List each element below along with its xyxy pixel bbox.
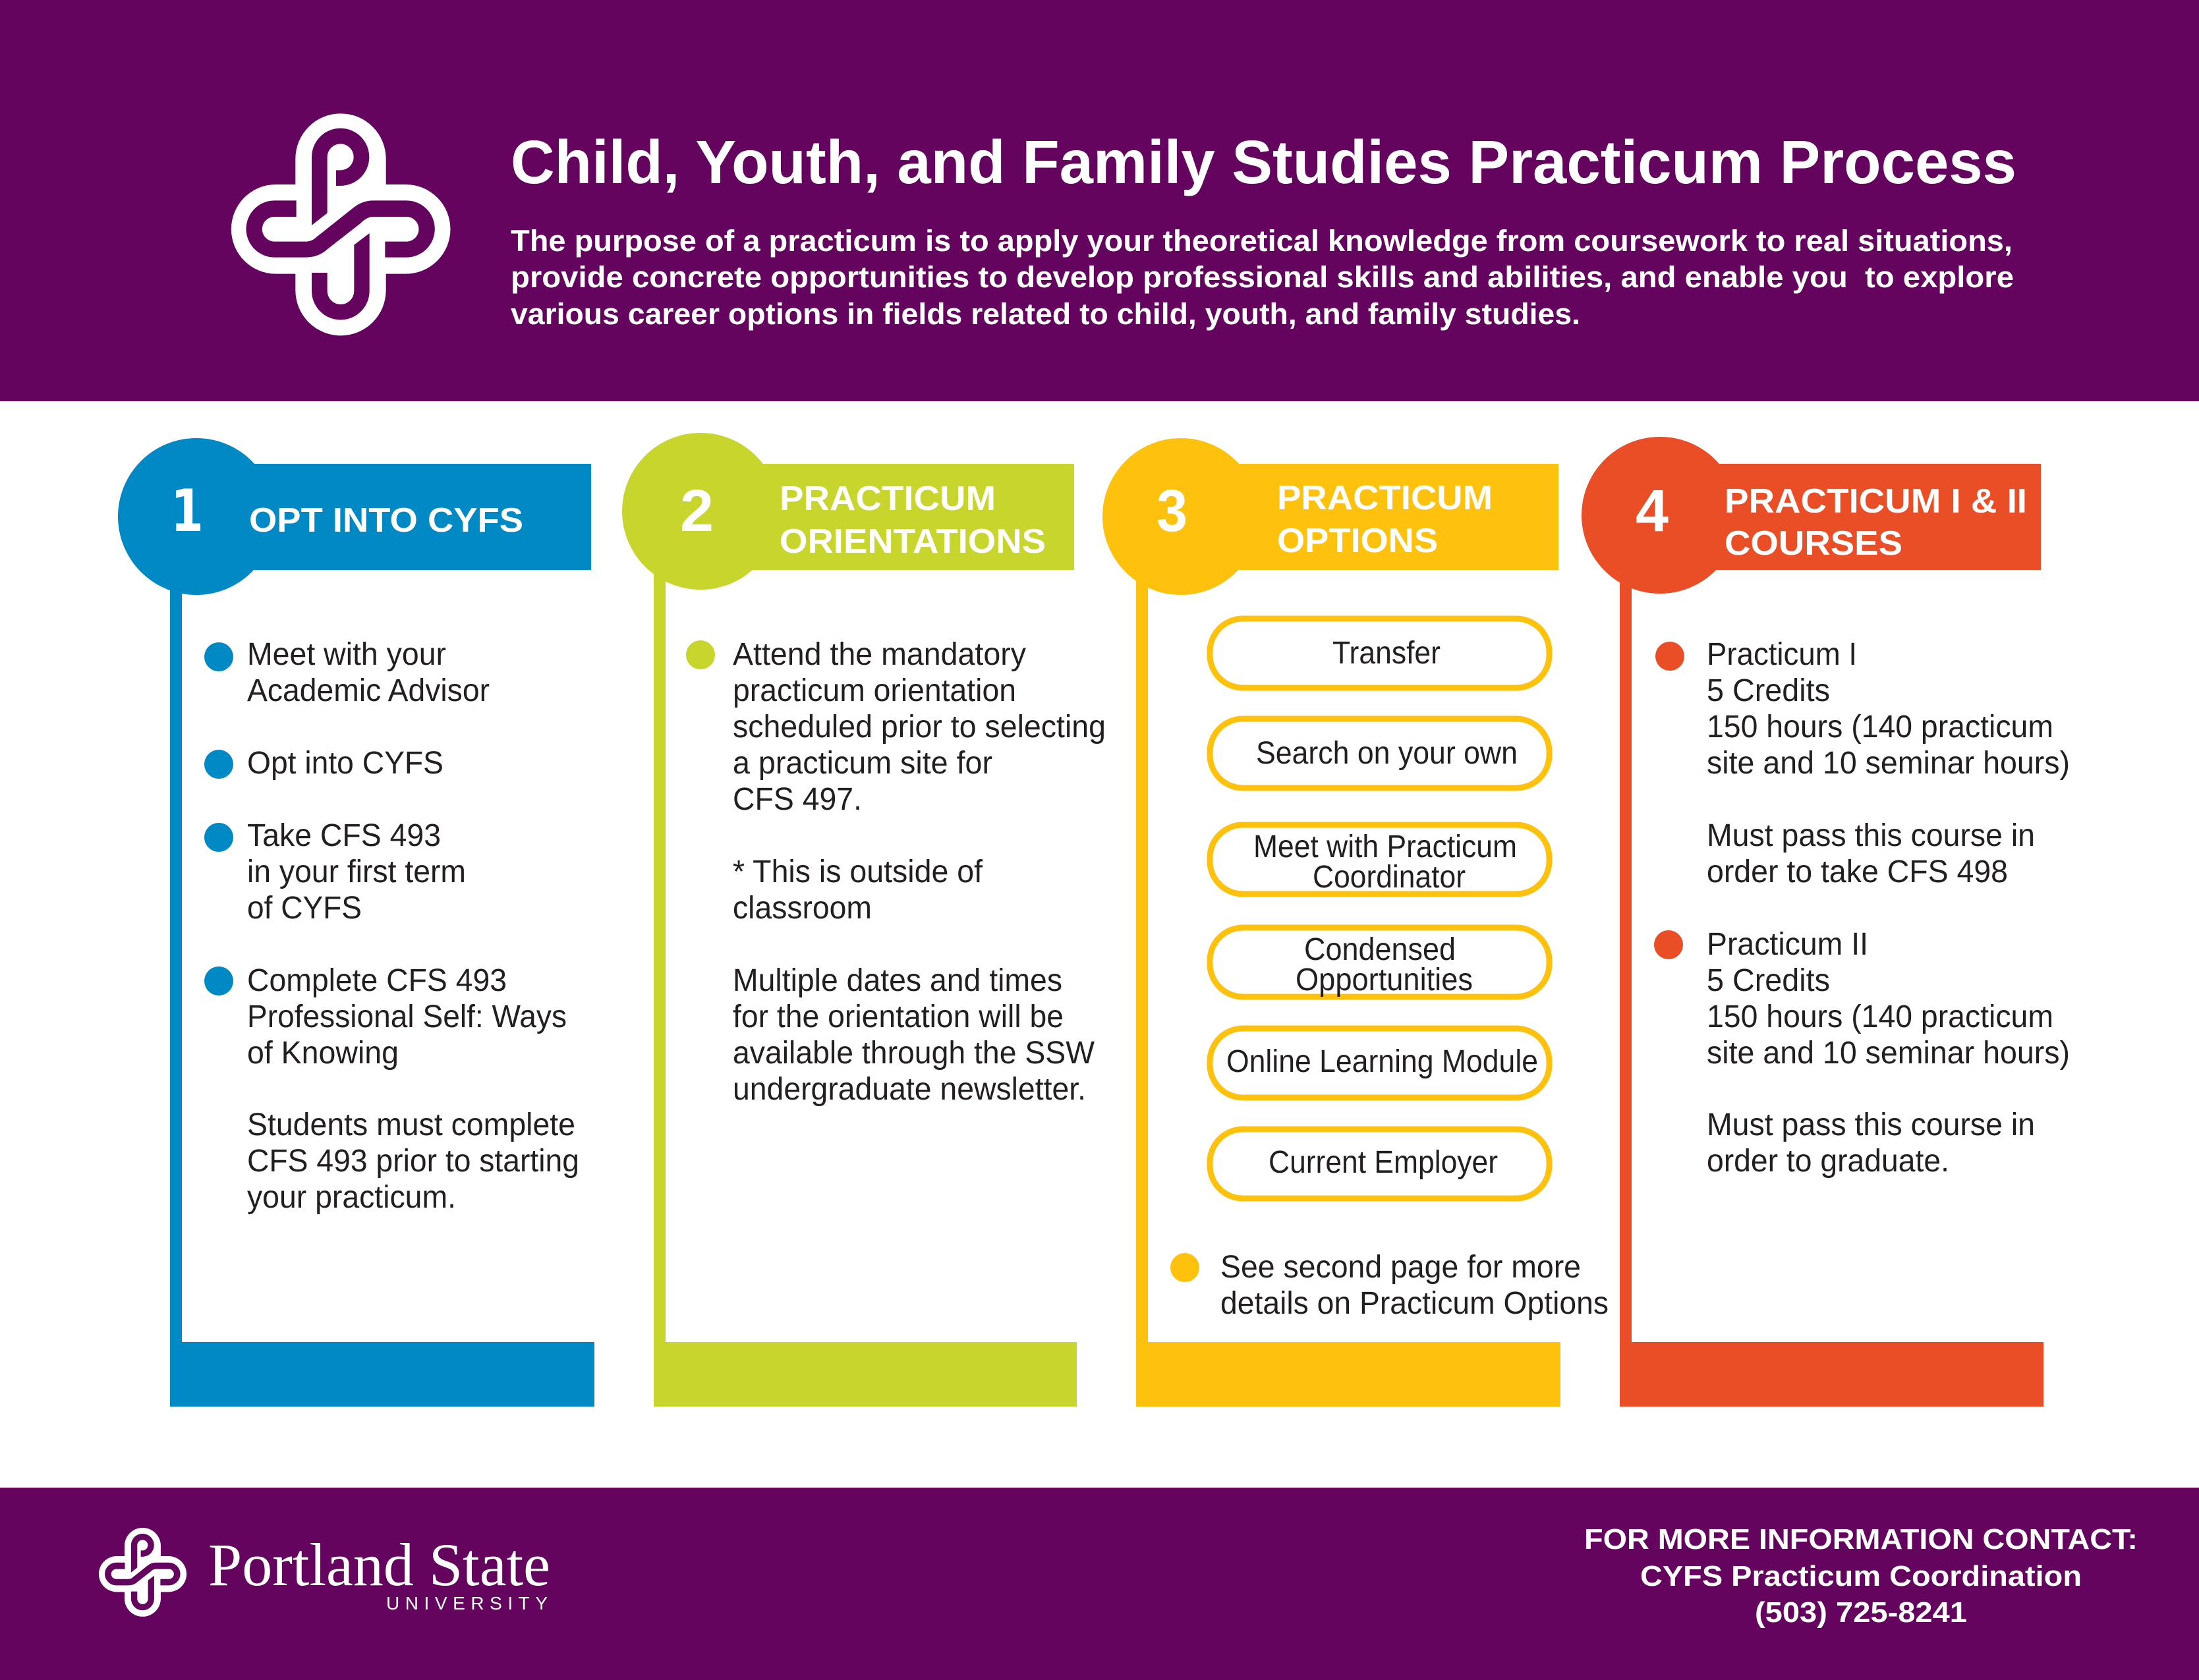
step 1 text: Meet with your	[247, 637, 446, 672]
step 2 text: classroom	[733, 891, 872, 926]
step 4 heading: 4	[1636, 478, 1669, 544]
step 1 heading: 1	[171, 477, 204, 545]
step 3 note: See second page for more	[1220, 1250, 1581, 1285]
option: condensed opportunities	[1210, 928, 1549, 997]
step 1 text: in your first term	[247, 854, 466, 889]
panel: footer banner	[0, 1488, 2199, 1680]
step 2 heading: 2	[680, 478, 714, 544]
step 4 text: site and 10 seminar hours)	[1707, 1036, 2070, 1071]
wordmark: Portland State University: UNIVERSITY	[386, 1593, 548, 1613]
step 2 text	[733, 637, 1106, 1107]
step 1 heading	[171, 477, 523, 545]
option: transfer	[1210, 619, 1549, 688]
step 1 text: Complete CFS 493	[247, 963, 507, 998]
wordmark: Portland State University: Portland State	[208, 1531, 550, 1598]
step 4 text	[1707, 637, 2070, 1179]
step 4 text: Practicum II	[1707, 927, 1868, 962]
step 2 text: Multiple dates and times	[733, 963, 1062, 998]
step 3 frame	[1102, 438, 1560, 1407]
step 4 text: 150 hours (140 practicum	[1707, 710, 2053, 744]
step 3 heading	[1157, 478, 1493, 560]
step 2 text: for the orientation will be	[733, 999, 1064, 1034]
panel: header banner	[0, 0, 2199, 401]
step 4 heading	[1636, 478, 2027, 563]
step 1 text: Students must complete	[247, 1107, 575, 1142]
icon: Portland State cross logo	[231, 113, 450, 335]
text block: practicum purpose: provide concrete opportunities to develop professional skills and abilities, and enable you to explore	[511, 260, 2014, 294]
step 1 text	[247, 637, 579, 1215]
option: transfer: Transfer	[1332, 636, 1441, 671]
step 1 bullets	[204, 642, 233, 995]
step 2 text: Attend the mandatory	[733, 637, 1026, 672]
step 3 heading: PRACTICUM	[1277, 479, 1493, 517]
step 1 text: CFS 493 prior to starting	[247, 1144, 579, 1179]
panel: step 1 opt into CYFS	[118, 438, 594, 1407]
step 4 text: order to take CFS 498	[1707, 854, 2008, 889]
option: condensed opportunities: Condensed	[1304, 932, 1456, 967]
contact information: FOR MORE INFORMATION CONTACT:	[1584, 1523, 2138, 1555]
panel: step 2 practicum orientations	[622, 433, 1106, 1407]
step 4 heading: PRACTICUM I & II	[1725, 482, 2027, 520]
contact information: (503) 725-8241	[1755, 1596, 1967, 1629]
step 2 text: available through the SSW	[733, 1036, 1095, 1071]
step 4 bullets	[1654, 642, 1684, 959]
step 1 text: Professional Self: Ways	[247, 999, 567, 1034]
option: meet with practicum coordinator: Meet with Practicum	[1253, 829, 1517, 864]
option: online learning module: Online Learning Module	[1226, 1044, 1538, 1079]
step 2 bullet	[686, 640, 715, 669]
panel: step 4 practicum courses	[1582, 437, 2070, 1407]
option: search on your own: Search on your own	[1256, 736, 1518, 771]
option: condensed opportunities: Opportunities	[1296, 963, 1473, 997]
step 2 text: practicum orientation	[733, 673, 1016, 708]
step 2 text: undergraduate newsletter.	[733, 1072, 1086, 1107]
panel: step 3 practicum options	[1102, 438, 1609, 1407]
step 3 heading: 3	[1157, 478, 1187, 544]
step 2 text: a practicum site for	[733, 746, 992, 781]
step 2 text: CFS 497.	[733, 782, 862, 817]
step 3 heading: OPTIONS	[1277, 522, 1438, 560]
contact information	[1584, 1523, 2138, 1629]
step 4 text: 5 Credits	[1707, 963, 1830, 998]
step 1 text: Academic Advisor	[247, 673, 490, 708]
step 4 text: Must pass this course in	[1707, 818, 2035, 853]
step 1 text: your practicum.	[247, 1180, 456, 1215]
step 4 text: site and 10 seminar hours)	[1707, 746, 2070, 781]
text block: practicum purpose: various career options in fields related to child, youth, and family studies.	[511, 297, 1580, 331]
step 1 text: of Knowing	[247, 1036, 399, 1071]
step 4 frame	[1582, 437, 2043, 1407]
icon: footer cross logo	[99, 1528, 186, 1617]
step 2 frame	[622, 433, 1077, 1407]
option: meet with practicum coordinator: Coordinator	[1313, 860, 1466, 895]
step 4 text: 5 Credits	[1707, 673, 1830, 708]
step 1 text: of CYFS	[247, 891, 362, 926]
step 1 heading: OPT INTO CYFS	[249, 501, 523, 540]
step 2 text: * This is outside of	[733, 854, 983, 889]
contact information: CYFS Practicum Coordination	[1640, 1560, 2082, 1592]
text block: practicum purpose	[511, 224, 2014, 331]
step 4 heading: COURSES	[1725, 524, 1902, 563]
step 2 heading	[680, 478, 1046, 561]
step 3 note: details on Practicum Options	[1220, 1286, 1609, 1321]
option: current employer: Current Employer	[1269, 1145, 1498, 1180]
option: online learning module	[1210, 1028, 1549, 1098]
step 4 text: Practicum I	[1707, 637, 1857, 672]
option: meet with practicum coordinator	[1210, 825, 1549, 895]
option: search on your own	[1210, 719, 1549, 788]
step 2 text: scheduled prior to selecting	[733, 710, 1106, 744]
step 2 heading: ORIENTATIONS	[780, 522, 1046, 561]
step 2 heading: PRACTICUM	[780, 480, 996, 518]
step 4 text: order to graduate.	[1707, 1144, 1949, 1179]
title: Child, Youth, and Family Studies Practicum Process	[511, 128, 2016, 196]
step 4 text: Must pass this course in	[1707, 1107, 2035, 1142]
text block: practicum purpose: The purpose of a practicum is to apply your theoretical knowledge from coursework to real situations,	[511, 224, 2013, 258]
step 3 note	[1220, 1250, 1609, 1321]
step 4 text: 150 hours (140 practicum	[1707, 999, 2053, 1034]
option: current employer	[1210, 1129, 1549, 1198]
step 1 text: Opt into CYFS	[247, 746, 443, 781]
step 3 bullet	[1170, 1253, 1199, 1282]
step 1 text: Take CFS 493	[247, 818, 441, 853]
step 1 frame	[118, 438, 594, 1407]
